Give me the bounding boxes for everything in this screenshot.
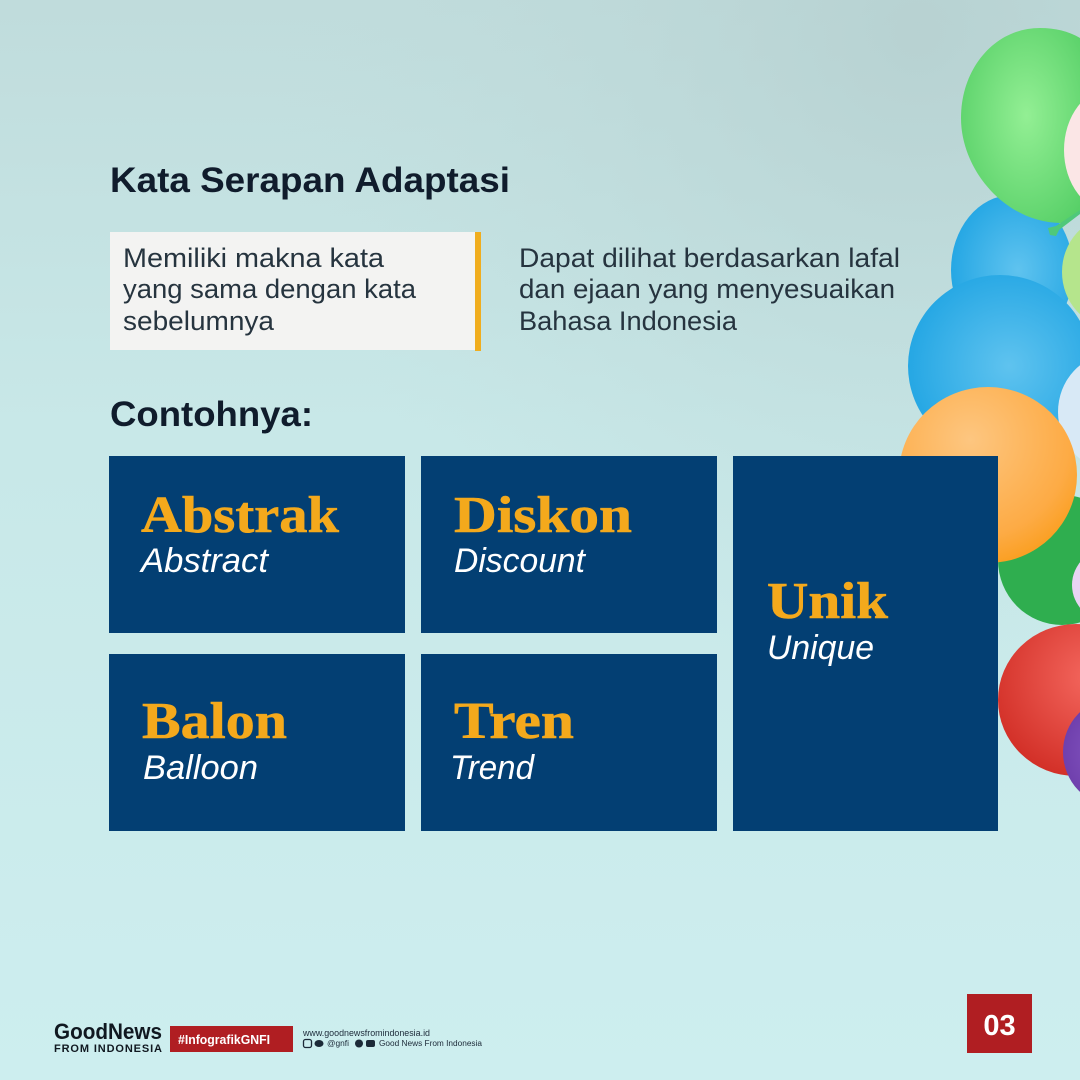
page number: 03 bbox=[983, 1010, 1016, 1042]
card: Abstrak: Abstract bbox=[139, 542, 270, 580]
logo: GoodNews: GoodNews bbox=[54, 1019, 162, 1044]
card: Diskon: Discount bbox=[454, 542, 587, 580]
icon: youtube bbox=[366, 1040, 375, 1047]
card: Unik bbox=[733, 456, 998, 831]
text block: description: dan ejaan yang menyesuaikan bbox=[519, 274, 895, 304]
logo: GoodNews: FROM INDONESIA bbox=[54, 1043, 162, 1055]
heading: examples: Contohnya: bbox=[110, 395, 313, 434]
title: Kata Serapan Adaptasi bbox=[110, 161, 510, 200]
card: Tren: Tren bbox=[454, 693, 574, 750]
card: Unik: Unique bbox=[767, 629, 874, 667]
card: Balon bbox=[109, 654, 405, 831]
card: Abstrak bbox=[109, 456, 405, 633]
social links: www.goodnewsfromindonesia.id bbox=[302, 1028, 430, 1038]
icon: twitter bbox=[314, 1040, 324, 1047]
panel: definition: yang sama dengan kata bbox=[123, 274, 417, 304]
card: Balon: Balon bbox=[142, 693, 287, 750]
card: Diskon bbox=[421, 456, 717, 633]
hashtag badge bbox=[170, 1026, 293, 1052]
card: Unik: Unik bbox=[767, 573, 888, 630]
panel: definition bbox=[110, 232, 481, 351]
balloons cluster bbox=[899, 28, 1080, 806]
social links: Good News From Indonesia bbox=[379, 1039, 483, 1048]
text block: description bbox=[519, 243, 900, 336]
panel: definition: sebelumnya bbox=[123, 306, 275, 336]
panel: definition: Memiliki makna kata bbox=[123, 243, 385, 273]
card: Tren: Trend bbox=[450, 749, 535, 787]
card: Tren bbox=[421, 654, 717, 831]
icon: facebook bbox=[355, 1040, 363, 1048]
card: Balon: Balloon bbox=[143, 749, 258, 787]
social links: @gnfi bbox=[327, 1039, 349, 1048]
text block: description: Dapat dilihat berdasarkan lafal bbox=[519, 243, 900, 273]
logo: GoodNews bbox=[54, 1019, 162, 1055]
hashtag badge: #InfografikGNFI bbox=[178, 1032, 270, 1047]
page number bbox=[967, 994, 1032, 1053]
icon: instagram bbox=[304, 1040, 312, 1048]
social links bbox=[302, 1028, 483, 1048]
text block: description: Bahasa Indonesia bbox=[519, 306, 738, 336]
card: Diskon: Diskon bbox=[454, 487, 632, 544]
card: Abstrak: Abstrak bbox=[141, 487, 339, 544]
